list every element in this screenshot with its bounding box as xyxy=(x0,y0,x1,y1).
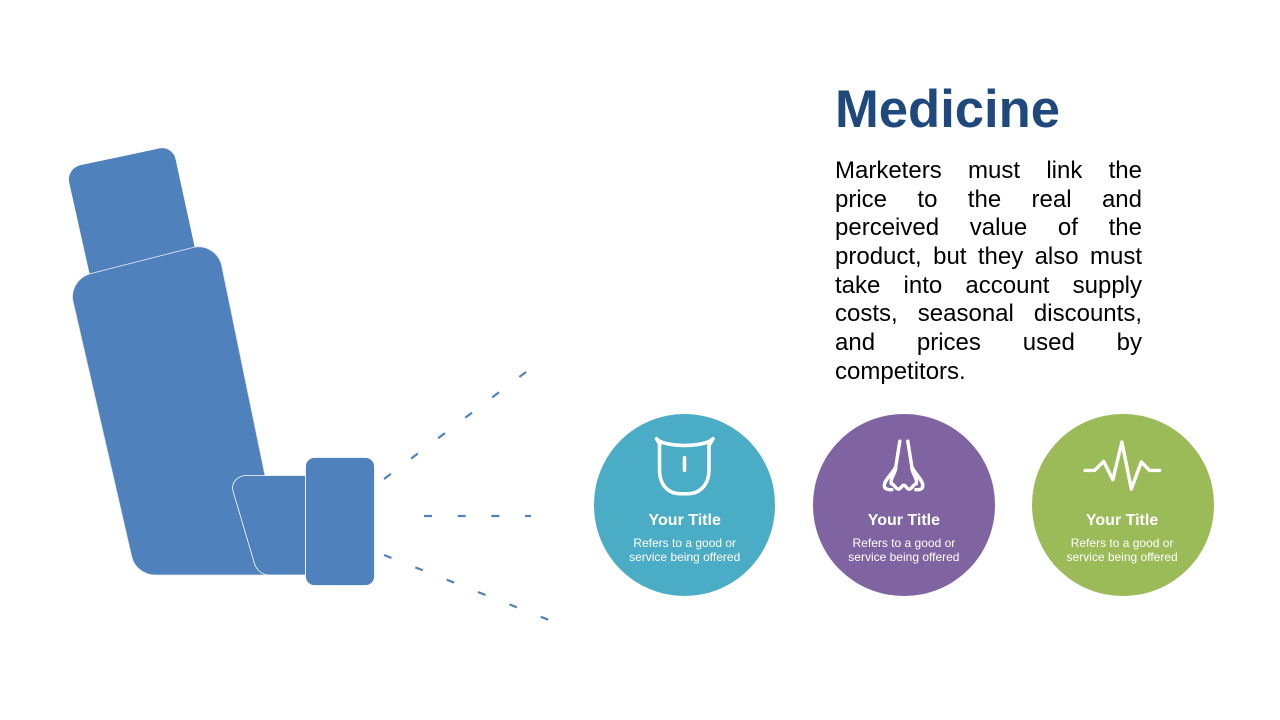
heading: your title: Your Title xyxy=(868,512,940,529)
description xyxy=(1066,536,1178,564)
body text: product, but they also must xyxy=(835,243,1142,270)
body text: costs, seasonal discounts, xyxy=(835,300,1142,327)
body text: competitors. xyxy=(835,358,966,385)
icon: tongue xyxy=(654,436,715,496)
spray: upper dashed line xyxy=(384,372,526,479)
description: service being offered xyxy=(629,550,740,564)
title: Medicine xyxy=(835,80,1060,139)
inhaler body xyxy=(72,247,305,575)
heading: your title: Your Title xyxy=(1086,512,1158,529)
panel: taste xyxy=(594,414,775,596)
panel: pulse xyxy=(1032,414,1214,596)
description xyxy=(629,536,740,564)
description: service being offered xyxy=(848,550,959,564)
panel: smell xyxy=(813,414,995,596)
icon: nose xyxy=(882,440,924,492)
body text: perceived value of the xyxy=(835,214,1142,241)
heading: your title: Your Title xyxy=(649,512,721,529)
body text: and prices used by xyxy=(835,329,1142,356)
inhaler canister cap xyxy=(69,148,195,274)
description: Refers to a good or xyxy=(633,536,736,550)
illustration: inhaler xyxy=(68,148,549,621)
description: Refers to a good or xyxy=(853,536,955,550)
description xyxy=(848,536,959,564)
description: Refers to a good or xyxy=(1071,536,1173,550)
spray: lower dashed line xyxy=(384,555,549,620)
inhaler mouthpiece cap xyxy=(306,458,374,586)
body text: take into account supply xyxy=(835,272,1142,299)
body text: price to the real and xyxy=(835,186,1142,213)
inhaler mouthpiece xyxy=(233,476,306,575)
body text xyxy=(835,157,1142,385)
spray: middle dashed line xyxy=(424,515,531,517)
description: service being offered xyxy=(1066,550,1178,564)
body text: Marketers must link the xyxy=(835,157,1142,184)
icon: pulse xyxy=(1083,440,1162,491)
